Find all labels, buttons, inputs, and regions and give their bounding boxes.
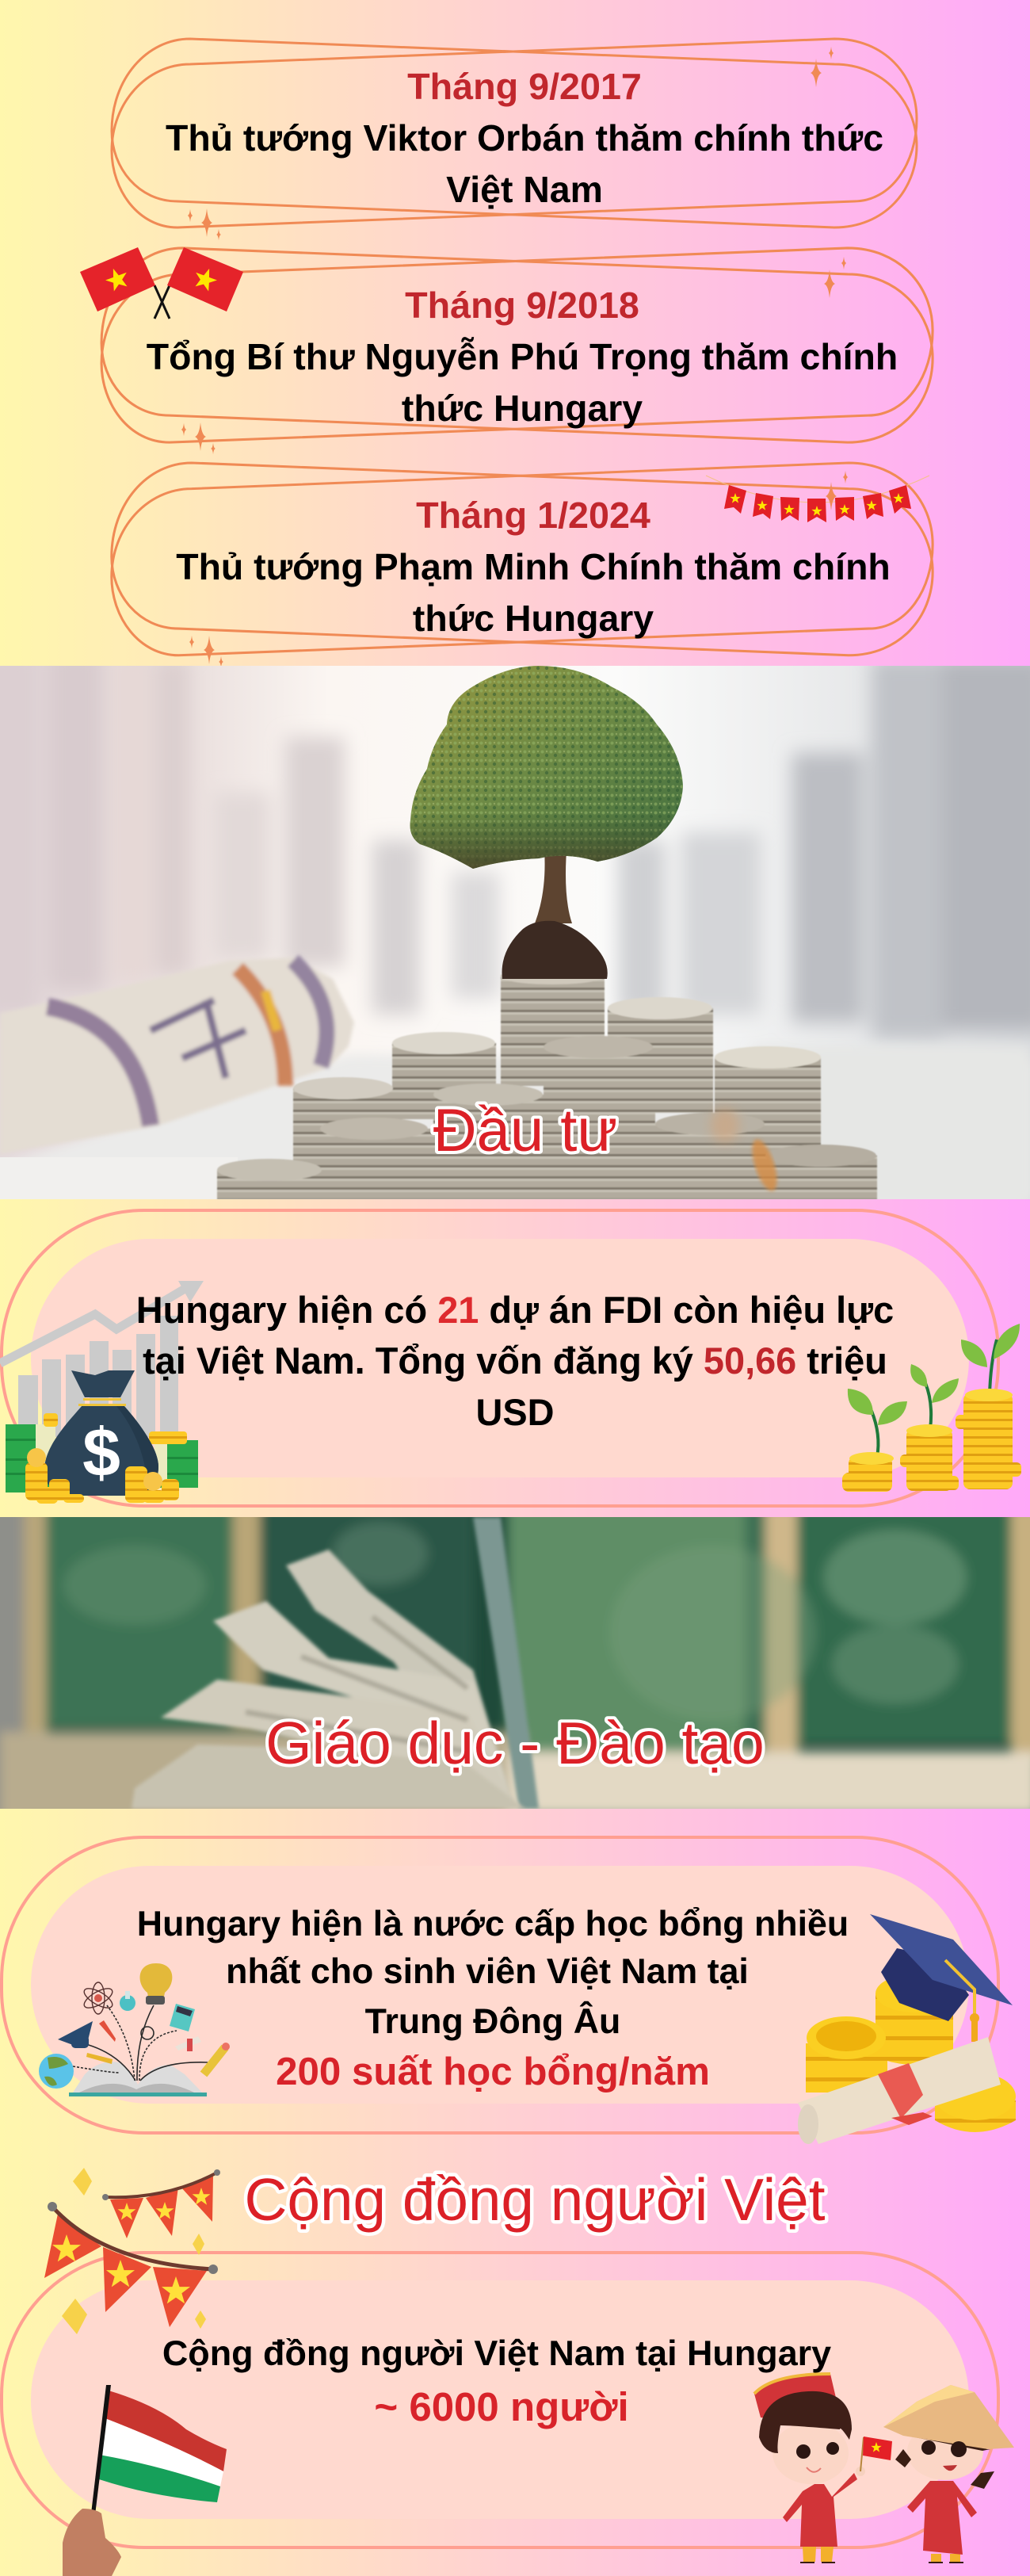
outer pill outline <box>2 1837 998 2133</box>
icon: crossed Vietnam flags <box>80 247 243 319</box>
text: visit 2018: Tổng Bí thư Nguyễn Phú Trọng thăm chính <box>147 336 898 377</box>
inner pill <box>31 1239 969 1477</box>
fanned book pages <box>132 1550 525 1809</box>
heading: Tháng 9/2018: Tháng 9/2018 <box>405 285 639 326</box>
frame: ornate oval 1 <box>112 39 917 227</box>
heading: Giáo dục - Đào tạo: Giáo dục - Đào tạo <box>265 1710 765 1776</box>
text: FDI figures: USD <box>475 1392 555 1433</box>
panel: September 2018 visit <box>80 247 933 454</box>
callout: 200 scholarships per year: 200 suất học bổng/năm <box>276 2050 710 2093</box>
heading: Cộng đồng người Việt: Cộng đồng người Việt <box>245 2166 826 2233</box>
frame: ornate oval 3 <box>112 463 933 655</box>
sparkles 2 <box>181 257 846 454</box>
photo: education, open book and chalkboards <box>0 1506 1030 1823</box>
inner pill <box>31 2280 969 2519</box>
text: scholarship details: nhất cho sinh viên Việt Nam tại <box>226 1952 749 1991</box>
icon: Hungarian flag held by hand <box>63 2385 227 2576</box>
icon: seedlings growing on coin stacks <box>842 1324 1021 1492</box>
frame: ornate oval 2 <box>101 248 933 442</box>
text: visit 2018: thức Hungary <box>402 388 643 429</box>
text: visit 2024: Thủ tướng Phạm Minh Chính thăm chính <box>176 546 891 587</box>
icon: education doodle with open book <box>39 1963 230 2096</box>
inner pill <box>31 1866 969 2104</box>
blurred skyscrapers <box>0 650 1030 1038</box>
panel: FDI investment <box>0 1210 1021 1506</box>
icon: money bag with cash and coins: $ <box>82 1415 120 1491</box>
tree trunk <box>535 856 572 923</box>
sparkles 3 <box>189 471 848 667</box>
text: visit 2017: Thủ tướng Viktor Orbán thăm chính thức <box>166 117 883 159</box>
text: FDI figures: tại Việt Nam. Tổng vốn đăng ký 50,66 triệu <box>143 1340 887 1382</box>
heading: Tháng 9/2017: Tháng 9/2017 <box>407 66 642 107</box>
soil ball <box>502 921 608 979</box>
panel: January 2024 visit <box>112 463 933 667</box>
heading: Đầu tư: Đầu tư <box>433 1097 617 1164</box>
text: community description: Cộng đồng người Việt Nam tại Hungary <box>162 2333 831 2373</box>
text: FDI figures: Hungary hiện có 21 dự án FDI còn hiệu lực <box>136 1290 894 1331</box>
outer pill outline <box>2 1210 998 1506</box>
panel: scholarships <box>2 1837 1016 2144</box>
falling orange coin blur <box>750 1137 780 1193</box>
sparkles 1 <box>188 47 834 240</box>
text: visit 2017: Việt Nam <box>446 169 603 210</box>
book cover spine <box>473 1517 539 1809</box>
tree canopy <box>410 666 683 869</box>
icon: money bag with cash and coins <box>6 1370 198 1504</box>
photo: investment, tree growing on coins <box>0 650 1030 1205</box>
text: visit 2024: thức Hungary <box>413 598 654 639</box>
outer pill outline <box>2 2253 998 2547</box>
icon: bar chart with rising arrow <box>0 1281 204 1437</box>
icon: Vietnamese boy and girl in ao dai <box>754 2374 1014 2563</box>
rolled newspaper <box>0 957 354 1154</box>
icon: festive bunting <box>44 2168 220 2334</box>
icon: bunting of Vietnam flags <box>706 476 929 522</box>
table surface <box>24 1054 715 1160</box>
coin stacks <box>217 969 877 1199</box>
text: scholarship details: Hungary hiện là nước cấp học bổng nhiều <box>137 1905 849 1943</box>
panel: Vietnamese community <box>2 2168 1014 2576</box>
boy <box>754 2374 892 2563</box>
panel: September 2017 visit <box>112 39 917 240</box>
callout: 6000 people: ~ 6000 người <box>374 2384 629 2429</box>
icon: graduation cap, gold coins and diploma <box>798 1914 1016 2144</box>
heading: Tháng 1/2024: Tháng 1/2024 <box>416 495 650 536</box>
text: scholarship details: Trung Đông Âu <box>365 2001 620 2041</box>
girl <box>883 2385 1014 2563</box>
